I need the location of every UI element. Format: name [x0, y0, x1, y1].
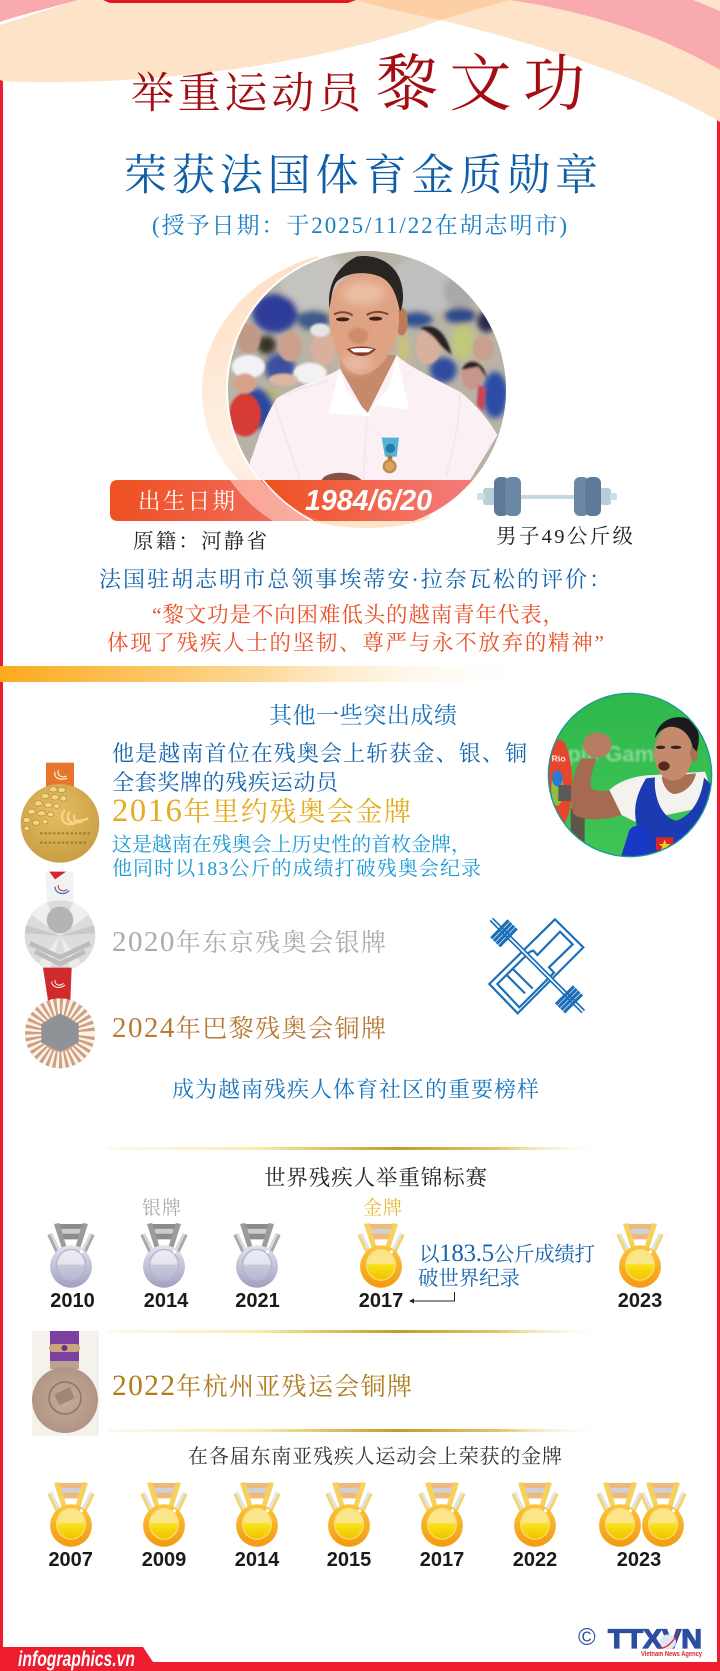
- SEA medal 2009: [140, 1482, 188, 1571]
- achievement text: [112, 741, 527, 795]
- SEA medal 2014: [233, 1482, 281, 1571]
- quote: 体现了残疾人士的坚韧、尊严与永不放弃的精神”: [107, 631, 604, 655]
- birth date value: 1984/6/20: [305, 485, 432, 517]
- silver medal: [25, 872, 95, 971]
- neck: [662, 773, 696, 794]
- consul attribution: 法国驻胡志明市总领事埃蒂安·拉奈瓦松的评价：: [99, 567, 611, 592]
- SEA medal 2014: 2014: [235, 1549, 280, 1571]
- arrow: [409, 1292, 454, 1304]
- photo: athlete celebrating: [547, 693, 712, 860]
- profile block: [110, 248, 520, 531]
- SEA medal 2017: 2017: [420, 1549, 464, 1571]
- world medal 2021: [233, 1223, 281, 1312]
- gold divider: [106, 1330, 608, 1333]
- medal title: 2020 silver: 2020年东京残奥会银牌: [112, 926, 386, 958]
- SEA medal 2017: [418, 1482, 466, 1571]
- logo: TTXVN: TTXVN: [608, 1624, 702, 1654]
- head: [654, 726, 693, 781]
- SEA medal 2007: [47, 1482, 95, 1571]
- world medal 2023: 2023: [618, 1290, 662, 1312]
- peach crescent: [202, 256, 430, 528]
- world medal 2010: 2010: [50, 1290, 95, 1312]
- photo: athlete celebrating: Rio: [552, 754, 566, 764]
- world medal 2014: 2014: [144, 1290, 189, 1312]
- SEA medal 2015: 2015: [327, 1549, 371, 1571]
- gold divider: [106, 1429, 608, 1432]
- world medal 2014: [140, 1223, 189, 1312]
- world medal 2010: [47, 1223, 95, 1312]
- red ribbon: [43, 968, 72, 1001]
- achievement text: 全套奖牌的残疾运动员: [112, 770, 340, 795]
- medal: Tokyo silver and Paris bronze: [25, 872, 95, 1068]
- weight class: 男子49公斤级: [496, 525, 633, 548]
- birth date bar: [110, 480, 320, 521]
- world record note: [418, 1240, 595, 1290]
- SEA medal 2022: [511, 1482, 559, 1571]
- closing statement: 成为越南残疾人体育社区的重要榜样: [172, 1077, 539, 1102]
- world medal 2017: [357, 1223, 405, 1312]
- arm: [571, 758, 622, 819]
- medal: Hangzhou bronze: [32, 1331, 99, 1436]
- head: [398, 308, 408, 336]
- title: [131, 51, 585, 119]
- quote: [107, 603, 604, 655]
- gold label: 金牌: [363, 1197, 402, 1219]
- logo: TTXVN: ©: [578, 1624, 596, 1651]
- world medal 2023: [616, 1223, 664, 1312]
- birth date label: 出生日期: [138, 489, 235, 514]
- SEA games heading: 在各届东南亚残疾人运动会上荣获的金牌: [188, 1445, 562, 1468]
- logo: TTXVN: Vietnam News Agency: [641, 1649, 703, 1658]
- singlet: [635, 777, 710, 854]
- SEA medal 2009: 2009: [142, 1549, 186, 1571]
- world medal 2017: 2017: [359, 1290, 403, 1312]
- icon: barbell: [477, 477, 617, 516]
- title: 黎文功: [376, 51, 585, 119]
- shirt: [250, 355, 497, 480]
- gradient divider band: [0, 666, 530, 682]
- silver label: 银牌: [142, 1197, 181, 1219]
- circle bottom segment: [261, 480, 473, 521]
- world record note: 以183.5公斤成绩打: [419, 1240, 595, 1267]
- SEA medal 2015: [325, 1482, 373, 1571]
- title: 举重运动员: [131, 71, 364, 118]
- medal title: 2024 bronze: 2024年巴黎残奥会铜牌: [112, 1012, 386, 1044]
- world record note: 破世界纪录: [418, 1267, 520, 1290]
- logo: TTXVN: [578, 1624, 703, 1658]
- section heading: 其他一些突出成绩: [269, 703, 457, 728]
- photo: athlete celebrating: pic Gam: [567, 742, 654, 767]
- hand: [322, 473, 362, 480]
- medal title: 2022 bronze: 2022年杭州亚残运会铜牌: [112, 1370, 412, 1402]
- SEA medal 2022: 2022: [513, 1549, 557, 1571]
- world medal 2021: 2021: [235, 1290, 280, 1312]
- top wave decoration: [0, 0, 720, 122]
- subtitle: 荣获法国体育金质勋章: [124, 152, 598, 200]
- SEA medals 2023: [596, 1482, 687, 1571]
- quote: “黎文功是不向困难低头的越南青年代表，: [152, 603, 564, 628]
- 2016 details: 他同时以183公斤的成绩打破残奥会纪录: [112, 857, 481, 880]
- world championships heading: 世界残疾人举重锦标赛: [264, 1166, 487, 1190]
- achievement text: 他是越南首位在残奥会上斩获金、银、铜: [112, 741, 527, 766]
- bronze medal: [25, 998, 95, 1068]
- footer tab: infographics.vn: [18, 1648, 135, 1671]
- shirt: [609, 772, 710, 822]
- 2016 details: 这是越南在残奥会上历史性的首枚金牌，: [112, 833, 471, 856]
- award date: (授予日期：于2025/11/22在胡志明市): [152, 213, 567, 238]
- medal on shirt: [382, 438, 399, 457]
- neck: [340, 355, 396, 413]
- portrait photo: [226, 251, 506, 480]
- SEA medals 2023: 2023: [617, 1549, 661, 1571]
- medal title: 2016 gold: 2016年里约残奥会金牌: [112, 793, 411, 829]
- SEA medal 2007: 2007: [48, 1549, 93, 1571]
- hometown: 原籍：河静省: [133, 530, 268, 553]
- icon: weightlifter: [489, 919, 583, 1013]
- 2016 details: [112, 833, 481, 880]
- medal: Rio gold: [21, 763, 99, 863]
- gold divider: [106, 1147, 608, 1150]
